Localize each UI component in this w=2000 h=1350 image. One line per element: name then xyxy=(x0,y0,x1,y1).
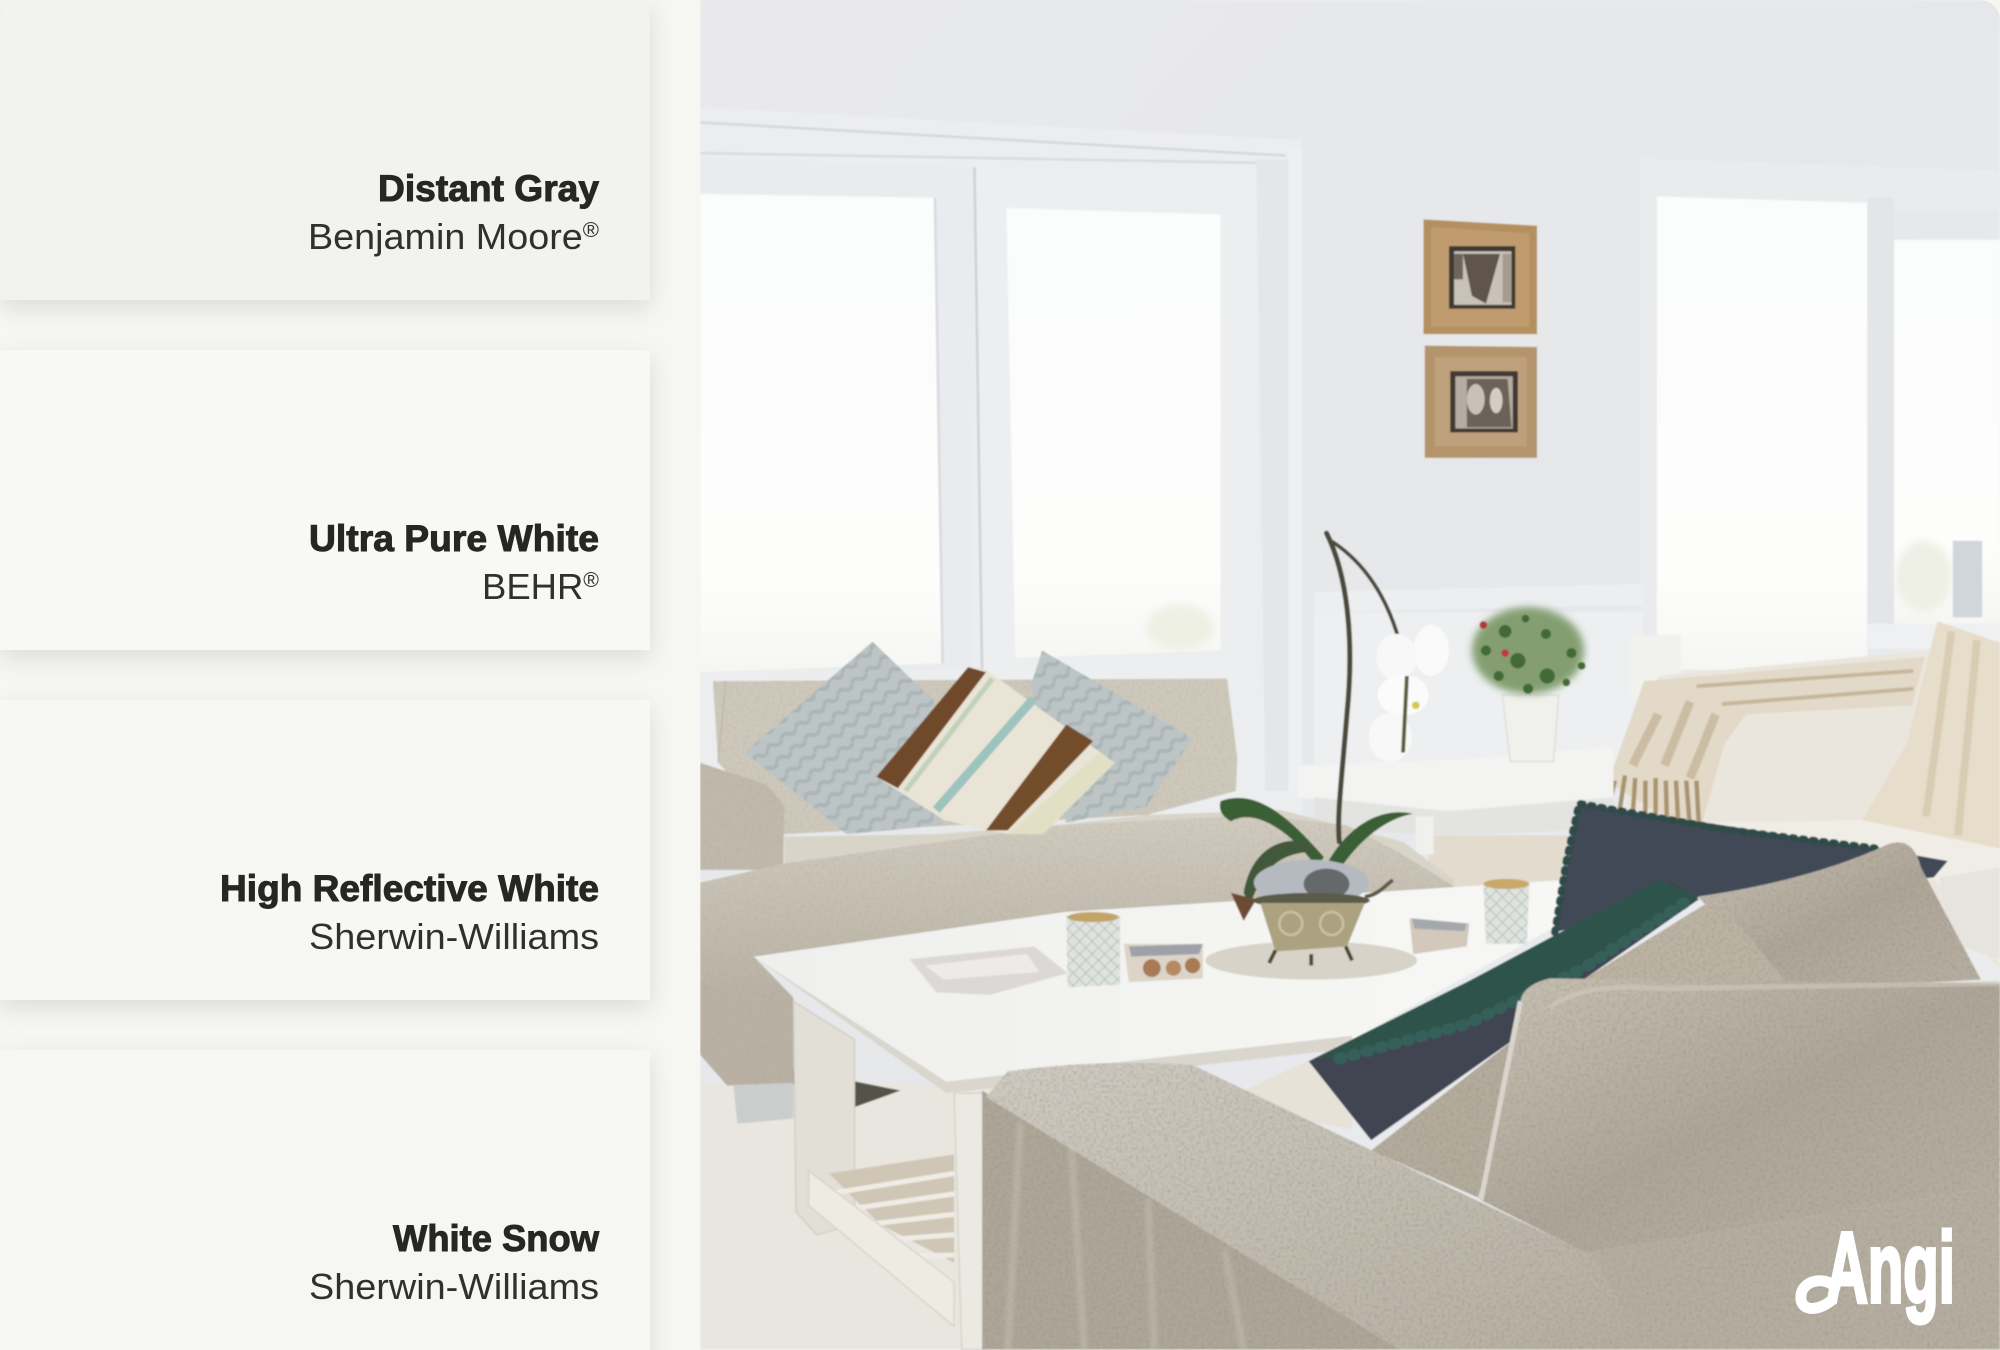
swatch card: Ultra Pure White: Ultra Pure White xyxy=(309,518,599,559)
mid beige cushion xyxy=(1586,904,1784,982)
sofa arm xyxy=(700,763,784,870)
left double window xyxy=(700,107,1302,816)
wainscot rail xyxy=(1314,584,1643,612)
potted plant xyxy=(1472,607,1585,761)
decorative dish xyxy=(909,946,1068,995)
swatch card: White Snow: Sherwin-Williams xyxy=(309,1266,599,1307)
swatch card: Ultra Pure White xyxy=(0,350,650,650)
mercury glass candle left xyxy=(1066,912,1120,987)
swatch card: Distant Gray xyxy=(0,0,650,300)
photo: white living room xyxy=(700,0,2000,1349)
floor xyxy=(1428,835,1570,888)
right white sofa xyxy=(1620,651,2000,969)
table top xyxy=(754,880,1562,1084)
Angi logo: Angi xyxy=(1826,1213,1955,1324)
panel: paint swatch cards xyxy=(0,0,650,1350)
swatch card: Distant Gray: Distant Gray xyxy=(378,168,599,209)
right window xyxy=(1656,196,2000,670)
swatch card: White Snow xyxy=(0,1050,650,1350)
swatch card: Distant Gray: ® xyxy=(583,219,600,242)
side table xyxy=(1302,765,1615,855)
navy pillow back xyxy=(1555,804,1948,932)
wedge beige cushion xyxy=(1371,1036,1519,1198)
mat xyxy=(1205,941,1417,980)
sofa base xyxy=(700,978,793,1085)
swatch card: High Reflective White: Sherwin-Williams xyxy=(309,916,599,957)
sofa seat xyxy=(784,810,1453,884)
striped cushion xyxy=(876,667,1115,834)
arm top face xyxy=(986,1063,1645,1349)
navy pillow front xyxy=(1309,880,1699,1140)
striped cushion, right xyxy=(1862,621,2000,848)
left sofa xyxy=(700,679,1454,1124)
swatch card: High Reflective White: High Reflective White xyxy=(220,868,599,909)
table shelf xyxy=(829,1154,954,1263)
foreground sofa arm xyxy=(982,1063,1645,1349)
back beige cushion xyxy=(1698,842,1981,990)
orchid stems xyxy=(1327,533,1407,842)
wall xyxy=(700,0,2000,1206)
metal bowl xyxy=(1231,860,1393,966)
sofa back xyxy=(713,679,1237,834)
throw blanket xyxy=(1608,657,1925,829)
swatch card: Ultra Pure White: ® xyxy=(583,569,600,592)
sofa foot xyxy=(733,1083,793,1124)
trinket box right xyxy=(1409,918,1469,954)
orchid flowers xyxy=(1369,625,1449,761)
arm side face xyxy=(982,1091,1403,1349)
mercury glass candle right xyxy=(1483,879,1529,944)
foreground sofa seat xyxy=(1467,1186,2000,1349)
framed photo: lower xyxy=(1425,346,1537,458)
table legs xyxy=(793,1001,855,1235)
swatch card: Ultra Pure White: BEHR xyxy=(482,566,582,607)
large beige cushion xyxy=(1481,978,2000,1253)
swatch card: Distant Gray: Benjamin Moore xyxy=(308,216,570,257)
coffee table xyxy=(754,880,1562,1349)
swatch card: White Snow: White Snow xyxy=(393,1218,599,1259)
swatch card: High Reflective White xyxy=(0,700,650,1000)
vase on sill xyxy=(1953,541,1982,617)
blue-gray cushions xyxy=(745,642,1193,834)
trinket box left xyxy=(1124,944,1203,982)
framed photo: upper xyxy=(1423,219,1537,334)
orchid leaves xyxy=(1220,798,1413,906)
